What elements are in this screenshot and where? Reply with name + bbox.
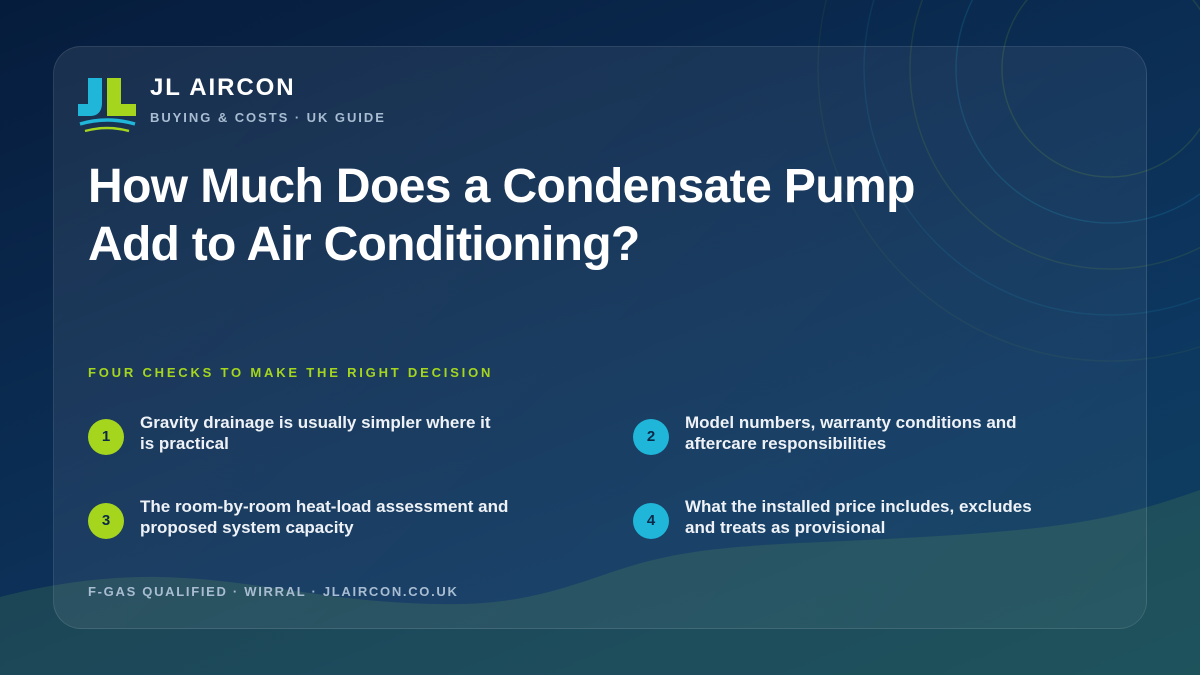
check 3: 3 — [102, 512, 110, 529]
check 3 — [88, 497, 508, 539]
check 4 — [633, 497, 1032, 539]
check 4: and treats as provisional — [685, 518, 885, 537]
title: How Much Does a Condensate Pump — [88, 160, 915, 213]
brand name: JL AIRCON — [150, 74, 296, 101]
glass panel — [53, 46, 1147, 629]
check 4: What the installed price includes, excludes — [685, 497, 1032, 516]
check 2: Model numbers, warranty conditions and — [685, 413, 1017, 432]
check 3: The room-by-room heat-load assessment and — [140, 497, 508, 516]
check 1: Gravity drainage is usually simpler where it — [140, 413, 491, 432]
title: Add to Air Conditioning? — [88, 218, 639, 271]
section heading: FOUR CHECKS TO MAKE THE RIGHT DECISION — [88, 365, 493, 380]
check 4: 4 — [647, 512, 655, 529]
footer text: F-GAS QUALIFIED · WIRRAL · JLAIRCON.CO.UK — [88, 584, 459, 599]
brand subtitle: BUYING & COSTS · UK GUIDE — [150, 110, 386, 125]
check 2: aftercare responsibilities — [685, 434, 886, 453]
title — [88, 160, 915, 271]
check 2 — [633, 413, 1017, 455]
check 3: proposed system capacity — [140, 518, 354, 537]
check 1: is practical — [140, 434, 229, 453]
check 1: 1 — [102, 428, 110, 445]
check 1 — [88, 413, 491, 455]
check 2: 2 — [647, 428, 655, 445]
icon: JL logo — [78, 78, 136, 132]
